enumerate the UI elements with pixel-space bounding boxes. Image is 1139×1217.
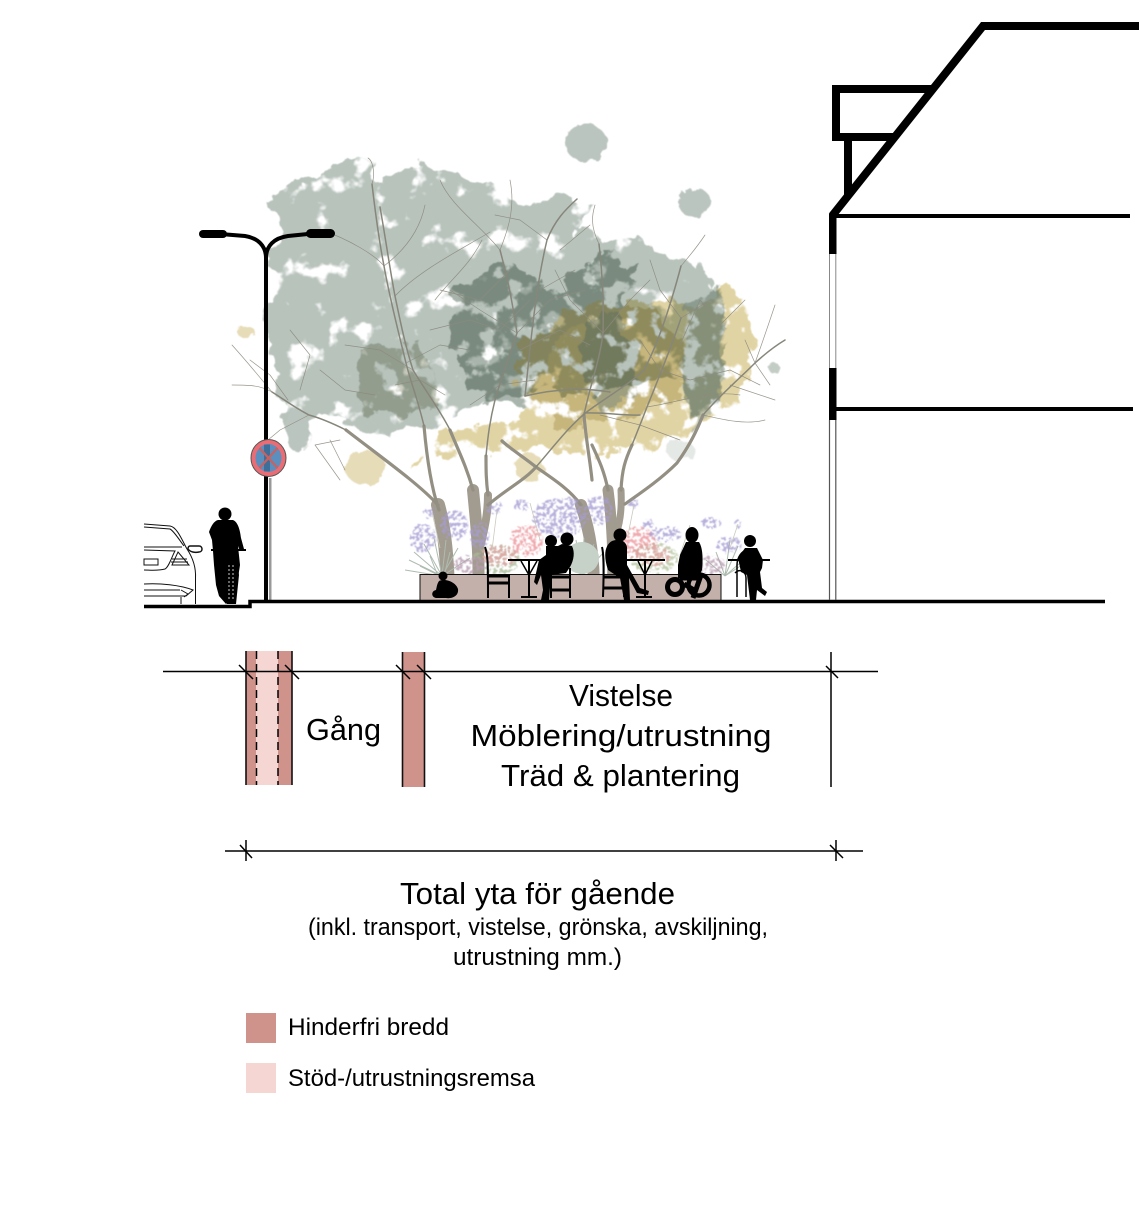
small splashes bbox=[237, 124, 780, 484]
text: total area note: (inkl. transport, vistelse, grönska, avskiljning, bbox=[308, 914, 768, 941]
building section bbox=[829, 26, 1139, 600]
icon: wheelchair bbox=[668, 574, 710, 598]
icon: chairs and tables bbox=[485, 547, 770, 598]
legend item: Stöd-/utrustningsremsa: Stöd-/utrustningsremsa bbox=[288, 1065, 536, 1092]
label: Vistelse, Möblering, Träd bbox=[470, 678, 772, 793]
trunks bbox=[438, 490, 621, 590]
grasses bbox=[405, 538, 748, 576]
legend bbox=[246, 1013, 536, 1093]
green shrubs bbox=[454, 543, 726, 575]
icon: no stopping sign bbox=[251, 440, 286, 476]
ground line bbox=[144, 602, 1105, 606]
text: total area note: utrustning mm.) bbox=[453, 944, 622, 971]
label: Vistelse, Möblering, Träd: Träd & plantering bbox=[501, 758, 740, 793]
dimension: total width bbox=[225, 840, 863, 861]
icon: seated people bbox=[534, 527, 767, 600]
street lamp bbox=[199, 229, 335, 601]
heading: total area: Total yta för gående bbox=[400, 876, 675, 911]
icon: trees bbox=[232, 158, 785, 590]
tree canopy watercolor bbox=[237, 124, 780, 484]
legend item: Hinderfri bredd: Hinderfri bredd bbox=[288, 1014, 449, 1041]
pink flowers bbox=[482, 525, 671, 566]
text: total area note bbox=[308, 914, 768, 971]
plants behind planter bbox=[405, 496, 748, 576]
label: Vistelse, Möblering, Träd: Möblering/utrustning bbox=[470, 718, 772, 753]
main limbs bbox=[346, 415, 703, 510]
icon: car bbox=[144, 524, 202, 604]
icon: cyclist bbox=[209, 508, 246, 604]
label: Gång: Gång bbox=[306, 712, 381, 747]
planter bbox=[420, 574, 721, 600]
dimension: upper bands bbox=[163, 651, 878, 787]
purple flowers bbox=[411, 496, 743, 553]
icon: crouching child bbox=[432, 572, 458, 598]
label: Vistelse, Möblering, Träd: Vistelse bbox=[569, 678, 673, 713]
